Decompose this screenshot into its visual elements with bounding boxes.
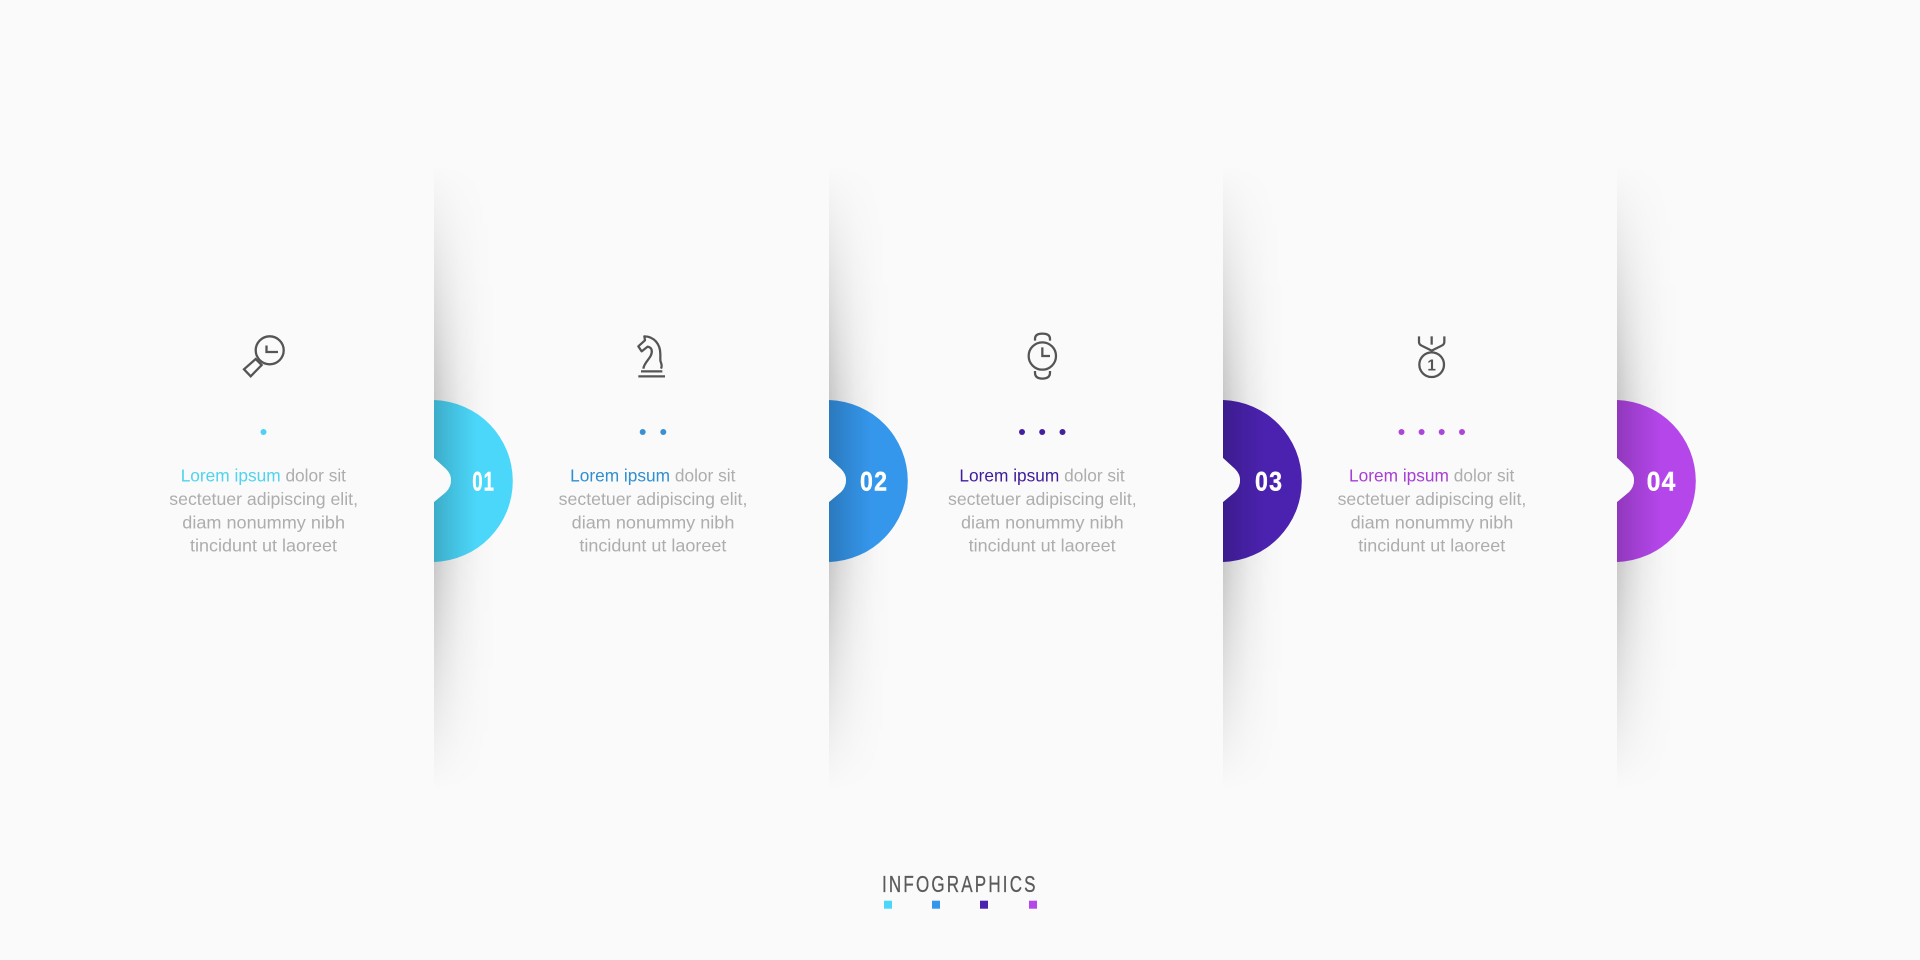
text block 1: sectetuer adipiscing elit, [169,489,358,509]
text block 3: Lorem ipsum dolor sit [959,466,1125,486]
panel: step 2 [559,204,908,752]
number tab 02: 02 [860,467,888,497]
text block 3: tincidunt ut laoreet [969,536,1116,556]
title: INFOGRAPHICS [882,871,1038,897]
dots 2 [640,429,666,435]
text block 1 [169,466,358,556]
panel: step 1 [170,204,513,752]
icon: wristwatch [1029,334,1056,379]
panel: step 4 [1338,204,1696,752]
text block 2 [559,466,747,556]
text block 1: tincidunt ut laoreet [190,536,337,556]
number tab 04: 04 [1647,467,1677,497]
text block 1: diam nonummy nibh [182,512,345,532]
text block 4: Lorem ipsum dolor sit [1349,466,1514,486]
legend squares [884,901,1037,909]
card shadow 3 [1223,204,1260,751]
card shadow 4 [1617,204,1654,752]
icon: chess knight [638,336,665,376]
text block 4 [1338,466,1526,556]
text block 2: Lorem ipsum dolor sit [570,466,736,486]
text block 2: sectetuer adipiscing elit, [559,489,747,509]
text block 3 [948,466,1137,556]
text block 1: Lorem ipsum dolor sit [181,466,346,486]
number tab 01 [434,400,513,562]
card shadow 1 [434,204,472,752]
text block 4: tincidunt ut laoreet [1358,536,1505,556]
icon: medal [1419,336,1444,377]
text block 4: diam nonummy nibh [1351,512,1513,532]
number tab 01: 01 [472,467,495,497]
icon: medal: 1 [1427,357,1436,374]
dots 1 [260,429,266,435]
text block 3: sectetuer adipiscing elit, [948,489,1137,509]
text block 3: diam nonummy nibh [961,512,1124,532]
number tab 03 [1223,400,1302,562]
number tab 02 [829,400,908,562]
dots 4 [1398,429,1465,435]
text block 2: diam nonummy nibh [572,512,734,532]
number tab 03: 03 [1255,467,1283,497]
number tab 04 [1617,400,1696,562]
panel: step 3 [948,204,1302,751]
card shadow 2 [829,204,866,752]
dots 3 [1019,429,1066,435]
text block 4: sectetuer adipiscing elit, [1338,489,1526,509]
icon: magnifier with clock [244,336,284,376]
text block 2: tincidunt ut laoreet [579,536,727,556]
